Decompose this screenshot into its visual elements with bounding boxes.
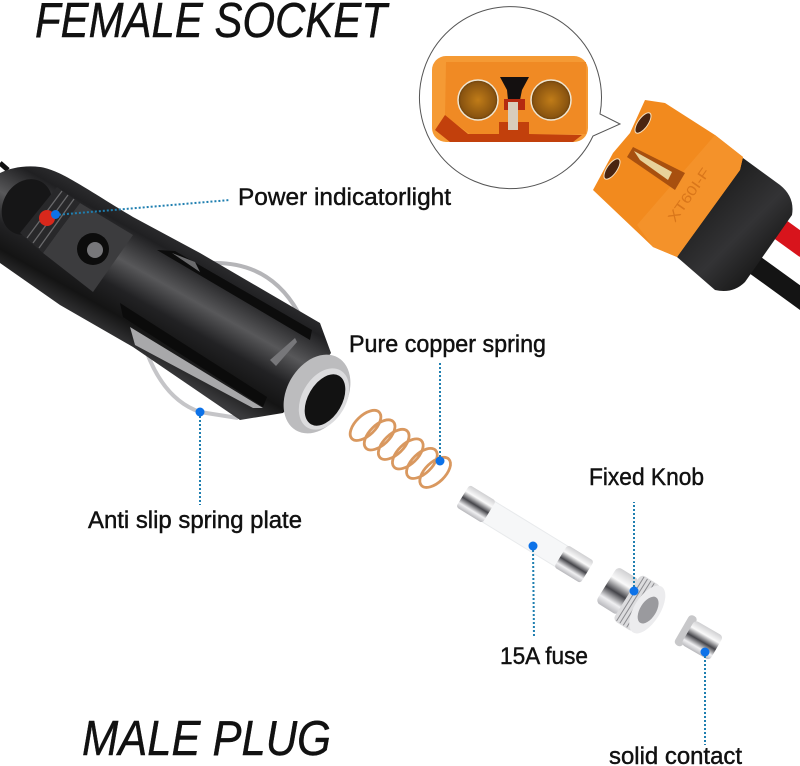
plug cable [0,163,8,170]
red LED [39,210,55,226]
wires [755,222,800,302]
head step [270,338,297,366]
callout: connector face magnified [419,7,620,189]
fixed knob [592,561,673,639]
metal collar [270,343,364,445]
leader: fuse [528,542,538,637]
switch plate [43,203,133,292]
solid contact [673,614,725,663]
female connector [593,100,792,291]
label: power indicator: Power indicatorlight [238,184,451,211]
lower fin [120,303,267,407]
plug opening [296,367,354,433]
upper fin [157,250,312,340]
embossed model text: XT60I-F [664,165,713,225]
label: pure copper spring: Pure copper spring [349,331,546,358]
leader: copper spring [436,362,444,466]
connector housing [593,100,743,257]
label: 15A fuse: 15A fuse [500,643,588,670]
glass fuse [456,485,594,583]
plug body [0,166,331,420]
switch recess [0,170,62,244]
label: anti slip spring plate: Anti slip spring plate [88,507,302,534]
ribbed switch [20,187,80,253]
anti slip spring plate: lower [147,353,238,418]
male plug [0,166,364,445]
copper spring [343,401,458,497]
spring plate: upper [213,263,298,312]
connector boot [677,158,792,291]
screw [77,233,109,265]
title: male plug: MALE PLUG [82,712,331,766]
leader: spring plate [196,408,204,505]
label: fixed knob: Fixed Knob [589,464,704,491]
leader: fixed knob [630,502,638,596]
connector face [432,56,588,142]
leader: power indicator [51,200,230,219]
leader: solid contact [700,648,710,745]
